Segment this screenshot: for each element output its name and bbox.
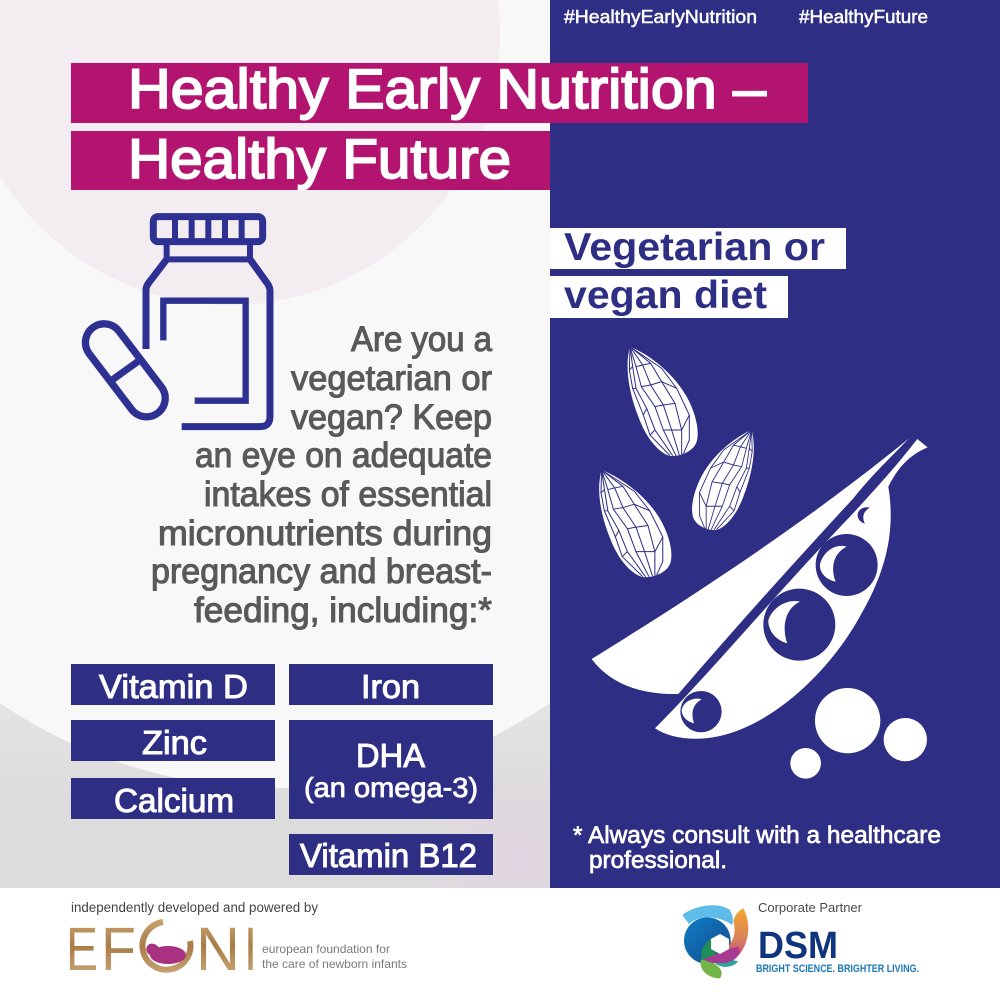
logo: DSM: BRIGHT SCIENCE. BRIGHTER LIVING.	[756, 963, 919, 975]
logo: EFCNI: I	[244, 915, 257, 983]
hashtags: #HealthyFuture	[799, 7, 928, 27]
footer credit text: independently developed and powered by	[71, 900, 318, 915]
paragraph: pregnancy and breast-	[151, 552, 492, 591]
micronutrient: Calcium: Calcium	[114, 782, 234, 819]
micronutrient: Iron: Iron	[361, 668, 420, 705]
icon: loose peas	[790, 688, 927, 779]
micronutrient: DHA: DHA	[356, 737, 425, 774]
title: Healthy Early Nutrition –	[128, 57, 767, 120]
logo: EFCNI	[66, 915, 407, 983]
logo: EFCNI: the care of newborn infants	[262, 957, 407, 971]
right background panel	[550, 0, 1000, 888]
micronutrient: Iron	[289, 664, 493, 705]
micronutrient: DHA: (an omega-3)	[304, 772, 478, 803]
micronutrient: Zinc: Zinc	[142, 724, 207, 761]
heading: vegetarian or vegan diet: Vegetarian or	[564, 226, 825, 269]
micronutrient: DHA	[289, 720, 493, 819]
paragraph	[151, 320, 493, 630]
paragraph: micronutrients during	[158, 514, 492, 553]
logo: EFCNI: E	[66, 915, 98, 983]
hashtags	[564, 7, 928, 27]
hashtags: #HealthyEarlyNutrition	[564, 7, 757, 27]
heading: vegetarian or vegan diet: vegan diet	[564, 274, 767, 317]
logo: EFCNI: N	[196, 915, 240, 983]
logo: EFCNI: european foundation for	[262, 942, 390, 956]
paragraph: feeding, including:*	[194, 591, 492, 630]
logo: DSM	[682, 905, 919, 978]
title	[71, 57, 808, 190]
micronutrient: Vitamin B12: Vitamin B12	[300, 837, 477, 874]
illustration: almonds and pea pod	[592, 347, 928, 779]
partner label: Corporate Partner	[758, 900, 863, 915]
left background panel	[0, 0, 550, 888]
micronutrient: Vitamin D	[71, 664, 275, 705]
paragraph: an eye on adequate	[195, 436, 492, 475]
logo: DSM: DSM	[758, 925, 838, 967]
footnote: * Always consult with a healthcare	[573, 822, 941, 849]
paragraph: intakes of essential	[204, 475, 492, 514]
icon: pea pod upper half	[592, 438, 909, 694]
icon: pill bottle and capsule	[78, 217, 270, 427]
micronutrient: Calcium	[71, 778, 275, 819]
logo: EFCNI: F	[101, 915, 136, 983]
paragraph: vegan? Keep	[291, 398, 492, 437]
icon: pea pod lower half with peas	[655, 439, 928, 739]
paragraph: vegetarian or	[291, 359, 492, 398]
paragraph: Are you a	[351, 320, 493, 359]
footnote	[573, 822, 941, 874]
footnote: professional.	[589, 847, 727, 874]
title: Healthy Future	[128, 127, 511, 190]
micronutrient: Vitamin D: Vitamin D	[99, 668, 248, 705]
micronutrient: Zinc	[71, 720, 275, 761]
icon: almonds	[599, 347, 754, 577]
heading: vegetarian or vegan diet	[550, 226, 846, 318]
